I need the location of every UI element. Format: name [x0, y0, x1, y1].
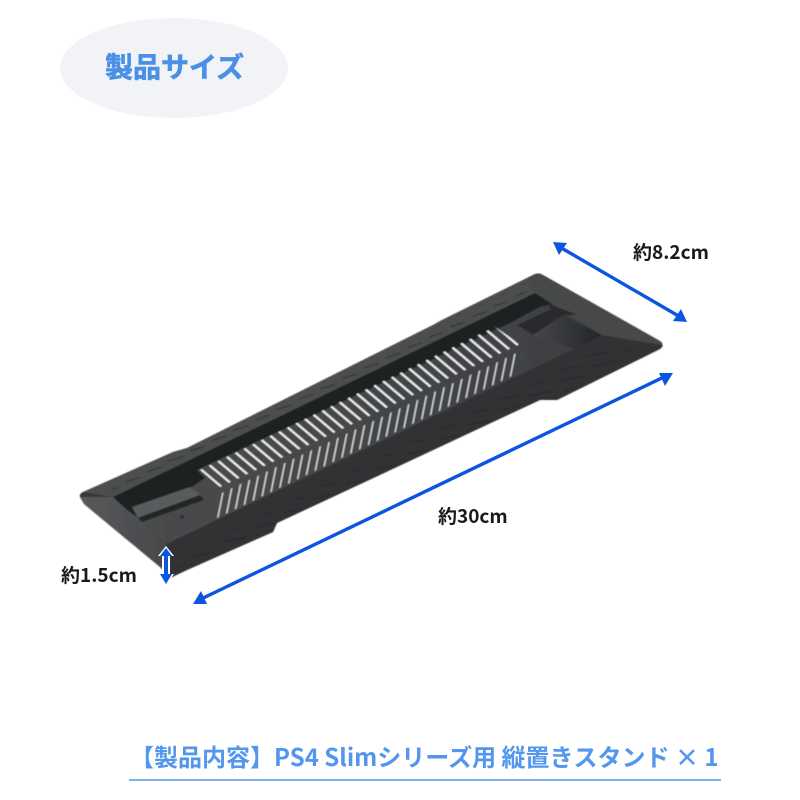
- right recess pocket: [533, 315, 602, 349]
- caption underline: [129, 779, 721, 781]
- top rim tread: [110, 283, 531, 493]
- dark channel: [113, 293, 552, 521]
- right tab: [517, 303, 578, 335]
- right end lip: [526, 274, 662, 345]
- title badge: 製品サイズ: [105, 46, 244, 86]
- arrow: length: [193, 373, 673, 604]
- product photo: vertical stand: [80, 274, 663, 578]
- title badge: [60, 18, 288, 118]
- contents caption: 【製品内容】PS4 Slimシリーズ用 縦置きスタンド × 1: [130, 738, 719, 773]
- top rim: [83, 274, 605, 543]
- recess floor: [113, 293, 602, 543]
- upper slat row: [200, 327, 520, 487]
- left screw hole: [180, 515, 184, 519]
- label: length: 約30cm: [438, 502, 508, 529]
- arrow: width: [553, 242, 687, 322]
- lower slat row: [217, 350, 523, 518]
- label: height: 約1.5cm: [61, 561, 137, 588]
- front band tread: [178, 350, 650, 572]
- left tab: [132, 487, 200, 518]
- left tab edge: [138, 487, 204, 522]
- label: width: 約8.2cm: [633, 238, 709, 265]
- left end lip: [80, 497, 170, 578]
- front sloped band: [170, 335, 663, 578]
- arrow: height: [158, 546, 174, 585]
- stand outer body: [80, 274, 663, 578]
